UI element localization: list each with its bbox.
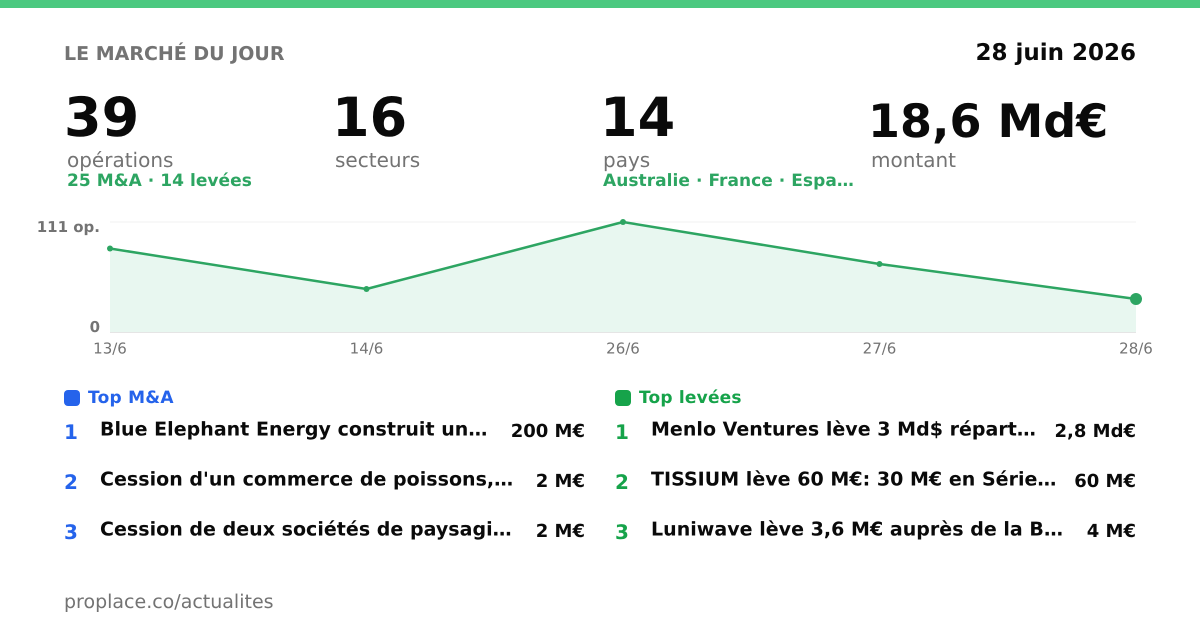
stat: amount: montant — [871, 148, 956, 172]
deal 1: Blue Elephant Energy construit un… — [100, 418, 487, 440]
round 1: Menlo Ventures lève 3 Md$ répart… — [651, 418, 1036, 440]
stat: countries: 14 — [600, 86, 675, 149]
panel: top M&A — [64, 388, 585, 544]
deal 2 — [64, 468, 585, 494]
y axis labels — [37, 218, 100, 336]
deal 3: 3 — [64, 520, 78, 544]
x axis labels: 27/6 — [863, 340, 896, 358]
deal 1: 200 M€ — [511, 421, 585, 442]
stat: sectors: secteurs — [335, 148, 420, 172]
x axis labels: 13/6 — [93, 340, 127, 358]
stat: operations: opérations — [67, 148, 173, 172]
deal 2: Cession d'un commerce de poissons,… — [100, 468, 513, 490]
stat: operations — [64, 86, 252, 191]
round 3: Luniwave lève 3,6 M€ auprès de la B… — [651, 518, 1063, 540]
date: 28 juin 2026 — [975, 40, 1136, 66]
stat: countries: Australie · France · Espa… — [603, 171, 854, 191]
deal 1: 1 — [64, 420, 78, 444]
x axis labels — [93, 340, 1153, 358]
section title: Top levées — [639, 388, 742, 408]
y axis labels: 111 op. — [37, 218, 100, 236]
stat: operations: 39 — [64, 86, 139, 149]
heading: LE MARCHÉ DU JOUR — [64, 43, 284, 65]
round 1: 1 — [615, 420, 629, 444]
panel: top fundraisings — [615, 388, 1136, 544]
stat: sectors — [332, 86, 420, 172]
line chart — [37, 218, 1153, 358]
round 2: 2 — [615, 470, 629, 494]
stat: amount: 18,6 Md€ — [868, 94, 1108, 148]
deal 3: Cession de deux sociétés de paysagi… — [100, 518, 512, 540]
deal 3 — [64, 518, 585, 544]
x axis labels: 28/6 — [1119, 340, 1153, 358]
stat: countries: pays — [603, 148, 650, 172]
top accent bar — [0, 0, 1200, 8]
deal 2: 2 M€ — [536, 471, 585, 492]
round 2 — [615, 468, 1136, 494]
stat: sectors: 16 — [332, 86, 407, 149]
round 2: 60 M€ — [1074, 471, 1136, 492]
stat: amount — [868, 94, 1108, 172]
footer: proplace.co/actualites — [64, 591, 274, 613]
round 1: 2,8 Md€ — [1055, 421, 1136, 442]
deal 1 — [64, 418, 585, 444]
x axis labels: 14/6 — [350, 340, 383, 358]
x axis labels: 26/6 — [606, 340, 640, 358]
round 3 — [615, 518, 1136, 544]
stat: operations: 25 M&A · 14 levées — [67, 171, 252, 191]
data points — [107, 219, 1142, 305]
y axis labels: 0 — [90, 318, 100, 336]
deal 3: 2 M€ — [536, 521, 585, 542]
round 2: TISSIUM lève 60 M€: 30 M€ en Série… — [651, 468, 1056, 490]
line — [110, 222, 1136, 299]
section title: Top M&A — [88, 388, 174, 408]
round 3: 4 M€ — [1087, 521, 1136, 542]
deal 2: 2 — [64, 470, 78, 494]
stat: countries — [600, 86, 854, 191]
area — [110, 222, 1136, 332]
round 1 — [615, 418, 1136, 444]
round 3: 3 — [615, 520, 629, 544]
